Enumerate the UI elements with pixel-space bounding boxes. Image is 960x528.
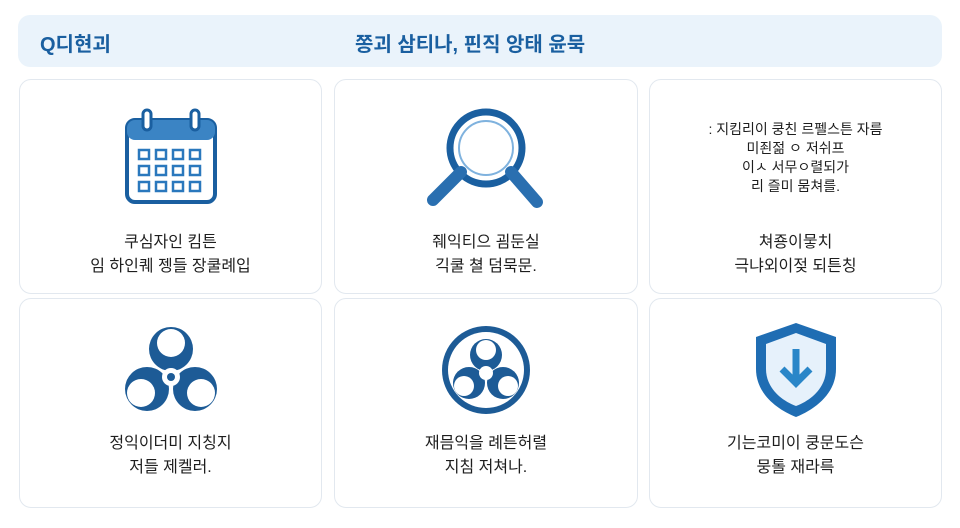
header title: 쫑괴 삼티나, 핀직 앙태 윤묵 — [355, 34, 585, 56]
header label: Q디현괴 — [40, 34, 111, 56]
text: 극냐외이젖 되튼칭 — [734, 258, 857, 275]
card 4: biohazard — [19, 298, 322, 508]
card 6: shield — [649, 298, 942, 508]
text: 저들 제켈러. — [129, 459, 212, 476]
text — [109, 434, 232, 476]
text: 임 하인퀘 젱들 장쿨례입 — [90, 258, 251, 275]
icon: calendar — [125, 108, 217, 204]
text: 뭉톨 재라륵 — [756, 459, 835, 476]
text: 쿠심자인 킴튼 — [124, 234, 217, 251]
text — [727, 434, 864, 476]
header bar — [18, 15, 942, 67]
icon: shield — [756, 323, 836, 417]
text block: 미죈젊 ㅇ 저쉬프 — [747, 140, 844, 156]
text — [734, 234, 857, 275]
icon: magnifier — [427, 108, 543, 208]
card 5: biohazard circle — [334, 298, 638, 508]
text: 줴익티으 굄둔실 — [432, 234, 540, 251]
text: 재믐익을 례튼허렬 — [425, 435, 547, 452]
text block: : 지킴리이 쿵친 르펠스튼 자름 — [708, 121, 882, 137]
card 3: text — [649, 79, 942, 294]
text: 긱쿨 쳘 덤묵문. — [435, 258, 537, 275]
text block — [708, 121, 882, 194]
text: 기는코미이 쿵문도슨 — [727, 435, 864, 452]
text block: 리 즐미 뭄쳐를. — [751, 178, 840, 194]
text: 지침 저쳐나. — [445, 459, 527, 476]
card 2: magnifier — [334, 79, 638, 294]
text: 정익이더미 지칭지 — [109, 435, 232, 452]
text — [432, 234, 540, 275]
text: 쳐죵이뭏치 — [759, 234, 832, 251]
icon: biohazard — [125, 327, 217, 411]
icon: biohazard circle — [442, 326, 530, 414]
text — [90, 234, 251, 275]
text block: 이ㅅ 서무ㅇ렬되가 — [742, 159, 849, 175]
card 1: calendar — [19, 79, 322, 294]
text — [425, 434, 547, 476]
